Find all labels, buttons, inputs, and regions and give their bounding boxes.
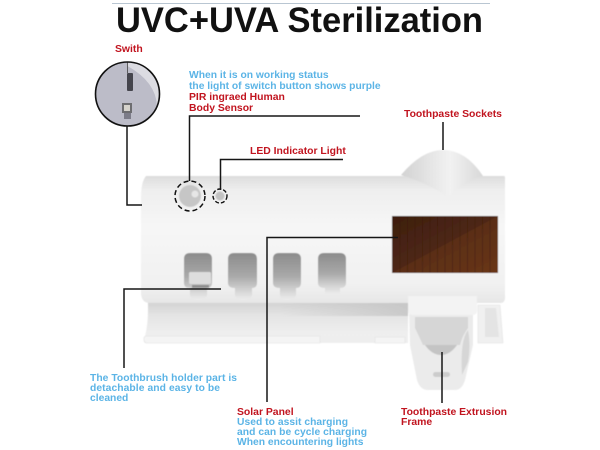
dashed sensor rings <box>175 181 227 211</box>
LED indicator <box>216 192 224 200</box>
label: toothbrush holder <box>90 373 237 404</box>
label: switch: Swith <box>115 44 143 55</box>
solar panel <box>392 216 498 273</box>
label: PIR sensor: Body Sensor <box>189 103 253 114</box>
label: toothbrush holder: The Toothbrush holder part is <box>90 373 237 384</box>
label: solar panel: and can be cycle charging <box>237 427 367 438</box>
label: PIR sensor: PIR ingraed Human <box>189 92 285 103</box>
label: PIR sensor: the light of switch button shows purple <box>189 81 381 92</box>
label: toothpaste extrusion frame: Toothpaste Extrusion <box>401 407 507 418</box>
product: toothbrush holder <box>141 150 505 390</box>
label: solar panel: Solar Panel <box>237 407 294 418</box>
label: PIR sensor <box>189 70 381 114</box>
label: toothbrush holder: detachable and easy to be <box>90 383 220 394</box>
dome: toothpaste socket <box>401 150 483 197</box>
PIR sensor <box>179 185 201 207</box>
toothpaste extrusion frame <box>408 296 477 390</box>
label: toothpaste sockets: Toothpaste Sockets <box>404 109 502 120</box>
switch inset <box>96 62 160 126</box>
label: PIR sensor: When it is on working status <box>189 70 329 81</box>
base tray <box>144 300 503 343</box>
label: solar panel <box>237 407 367 448</box>
label: solar panel: Used to assit charging <box>237 417 348 428</box>
label: toothpaste extrusion frame <box>401 407 507 428</box>
leader lines <box>124 116 443 403</box>
label: solar panel: When encountering lights <box>237 437 364 448</box>
title: UVC+UVA Sterilization <box>116 0 483 40</box>
label: LED indicator light: LED Indicator Light <box>250 146 346 157</box>
toothbrush slots <box>184 253 346 300</box>
main housing <box>141 176 505 303</box>
label: toothbrush holder: cleaned <box>90 393 128 404</box>
label: toothpaste extrusion frame: Frame <box>401 417 432 428</box>
